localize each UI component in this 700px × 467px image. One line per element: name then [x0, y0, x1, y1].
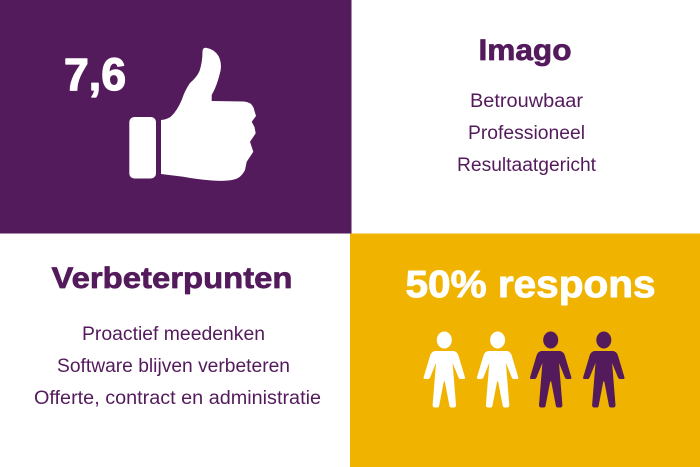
heading: imago: Imago — [478, 34, 572, 67]
icon: person purple 1 — [530, 332, 571, 408]
list: verbeterpunten: Offerte, contract en administratie — [34, 388, 321, 409]
icon: person white 2 — [477, 332, 518, 408]
panel: imago — [352, 0, 700, 234]
list: imago: Professioneel — [468, 123, 585, 144]
icon: thumbs up — [129, 48, 256, 181]
heading: verbeterpunten: Verbeterpunten — [52, 262, 292, 295]
score value: 7,6 — [64, 49, 126, 100]
icon: person purple 2 — [583, 332, 625, 408]
list: imago — [457, 91, 597, 176]
panel: score — [0, 0, 352, 234]
panel: respons — [350, 234, 700, 467]
list: imago: Resultaatgericht — [457, 155, 597, 176]
list: verbeterpunten — [34, 324, 321, 409]
list: verbeterpunten: Proactief meedenken — [82, 324, 265, 345]
list: imago: Betrouwbaar — [470, 91, 584, 112]
icon: person white 1 — [424, 332, 465, 408]
panel: verbeterpunten — [0, 234, 350, 467]
list: verbeterpunten: Software blijven verbeteren — [57, 356, 290, 377]
heading: respons: 50% respons — [406, 264, 656, 306]
